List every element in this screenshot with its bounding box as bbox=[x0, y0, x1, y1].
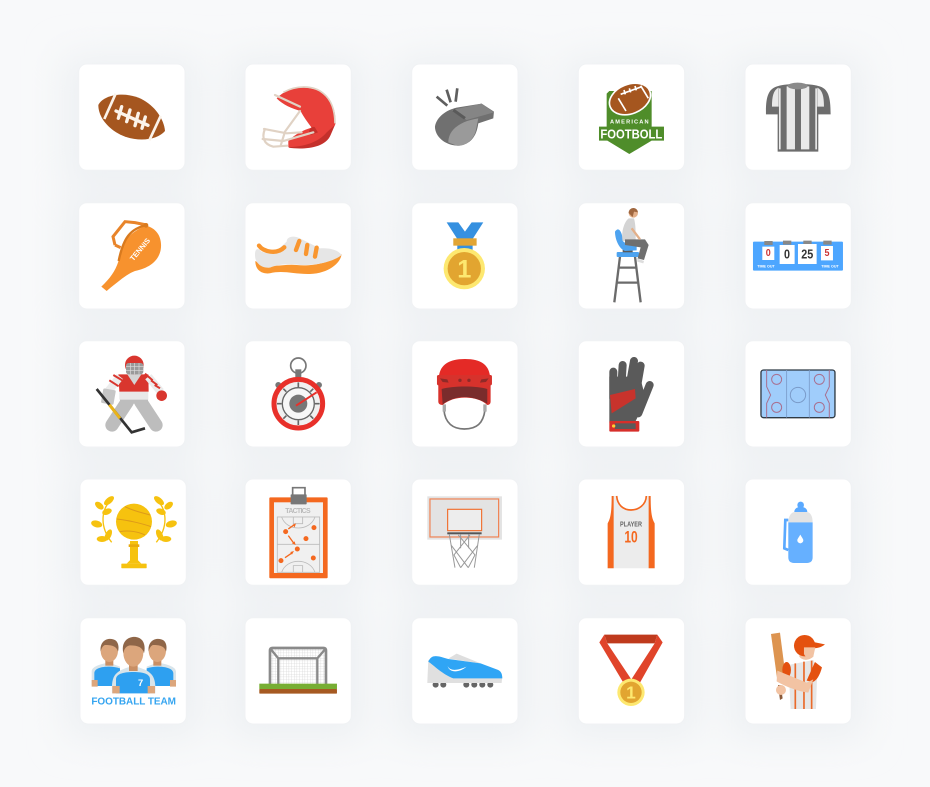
icon: football team bbox=[91, 637, 176, 708]
icon: red ribbon medal: 1 bbox=[626, 683, 636, 703]
icon: football team: FOOTBALL TEAM bbox=[91, 697, 176, 708]
icon: scoreboard: 5 bbox=[824, 248, 830, 259]
panel: hockey rink bbox=[745, 341, 851, 447]
panel: soccer goal bbox=[245, 618, 351, 724]
panel: tactics board bbox=[245, 479, 351, 585]
panel: soccer cleat bbox=[412, 618, 518, 724]
icon: tennis racket bag: TENNIS bbox=[128, 236, 152, 263]
icon: badge: FOOTBOLL bbox=[600, 127, 663, 141]
icon: helmet bbox=[263, 87, 336, 148]
icon: scoreboard: TIME OUT bbox=[821, 264, 839, 268]
icon: football team: 7 bbox=[138, 678, 143, 688]
panel: hockey helmet bbox=[412, 341, 518, 447]
icon: cleat bbox=[427, 654, 502, 688]
panel: baseball player bbox=[745, 618, 851, 724]
icon: baseball player bbox=[771, 633, 825, 709]
icon: scoreboard: TIME OUT bbox=[757, 264, 775, 268]
icon: hoop bbox=[427, 496, 502, 568]
icon: umpire chair bbox=[614, 208, 649, 302]
icon: shoe bbox=[255, 237, 342, 274]
icon: stopwatch bbox=[274, 358, 323, 428]
panel: umpire on chair bbox=[578, 203, 685, 309]
panel: glove bbox=[578, 341, 685, 447]
icon: goal bbox=[259, 648, 337, 694]
icon: player jersey: 10 bbox=[624, 528, 638, 547]
panel: scoreboard bbox=[745, 203, 851, 309]
icon: whistle bbox=[435, 88, 494, 146]
icon: badge: AMERICAN bbox=[610, 120, 649, 126]
icon: scoreboard bbox=[753, 241, 843, 271]
icon: rink bbox=[761, 370, 835, 418]
icon: medal: 1 bbox=[457, 256, 471, 284]
icon: player jersey: PLAYER bbox=[620, 519, 643, 528]
panel: whistle bbox=[412, 64, 518, 170]
panel: trophy bbox=[80, 479, 186, 585]
panel: medal with red ribbon bbox=[578, 618, 685, 724]
icon: goalie bbox=[97, 356, 167, 432]
icon: football bbox=[98, 94, 165, 140]
panel: american football helmet bbox=[245, 64, 351, 170]
panel: basketball hoop bbox=[412, 479, 518, 585]
panel: hockey goalie bbox=[79, 341, 185, 447]
icon: player jersey bbox=[608, 496, 655, 568]
icon: trophy bbox=[90, 494, 178, 568]
icon: scoreboard: 25 bbox=[801, 248, 813, 262]
panel: tennis bag bbox=[79, 203, 185, 309]
panel: football team bbox=[80, 618, 186, 724]
icon: hockey helmet bbox=[437, 359, 492, 429]
panel: running shoe bbox=[245, 203, 351, 309]
icon: glove bbox=[609, 361, 650, 432]
icon: badge bbox=[599, 77, 664, 154]
panel: referee shirt bbox=[745, 64, 851, 170]
panel: water bottle bbox=[745, 479, 851, 585]
icon: tactics clipboard: TACTICS bbox=[285, 508, 311, 515]
icon: scoreboard: 0 bbox=[784, 248, 790, 262]
icon: scoreboard: 0 bbox=[766, 248, 771, 259]
icon: water bottle bbox=[784, 502, 813, 563]
panel: stopwatch bbox=[245, 341, 351, 447]
panel: american football badge bbox=[578, 64, 685, 170]
icon: referee shirt bbox=[766, 83, 831, 152]
panel: basketball jersey bbox=[578, 479, 685, 585]
panel: gold medal bbox=[412, 203, 518, 309]
panel: football bbox=[79, 64, 185, 170]
